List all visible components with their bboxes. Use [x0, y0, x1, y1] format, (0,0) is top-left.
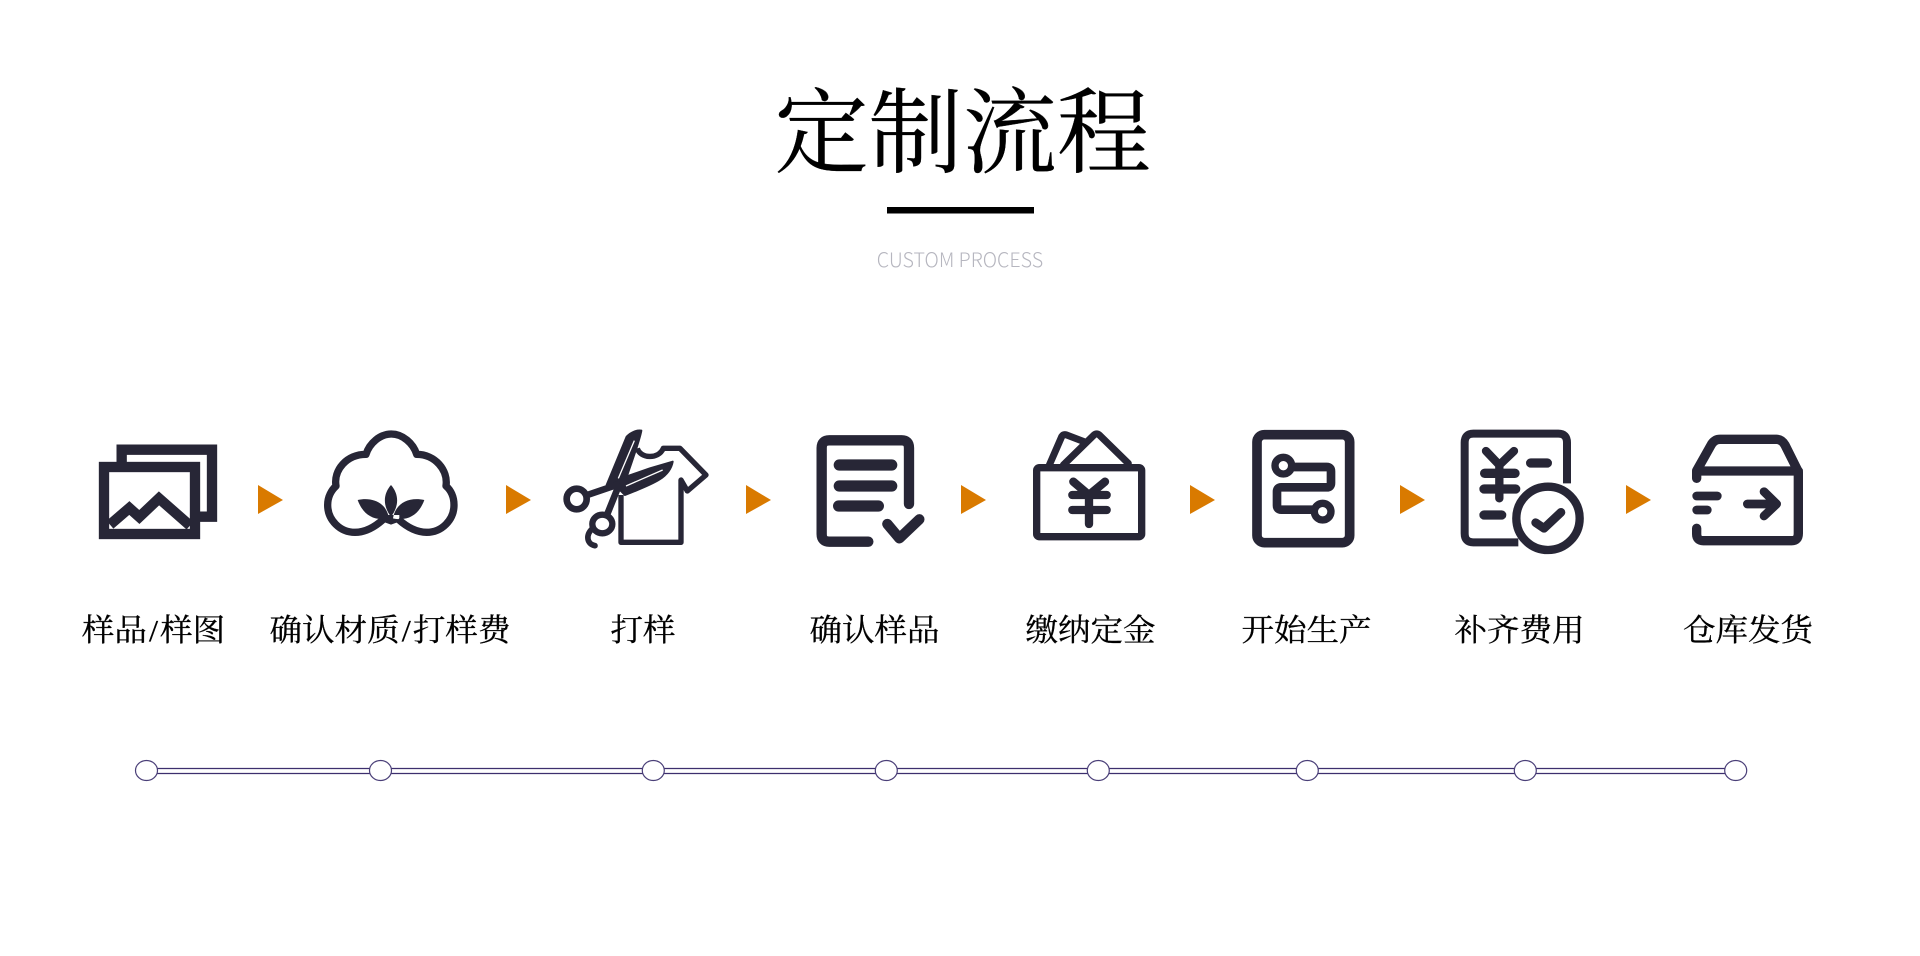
title underline: [887, 207, 1034, 214]
label: confirm material and fee: 确认材质/打样费: [270, 614, 512, 648]
arrow 4: [961, 485, 986, 514]
icon: warehouse box: [1697, 439, 1798, 541]
label: samples: 样品/样图: [82, 614, 225, 648]
arrow 2: [506, 485, 531, 514]
icon: stacked pictures: [104, 450, 212, 534]
label: start production: 开始生产: [1241, 606, 1372, 651]
arrow 6: [1400, 485, 1425, 514]
icon: production flow: [1257, 435, 1350, 543]
icon: wallet with yen: [1037, 434, 1142, 537]
title: 定制流程: [774, 58, 1151, 192]
icon: cotton: [328, 434, 454, 532]
arrow 7: [1626, 485, 1651, 514]
label: warehouse shipping: 仓库发货: [1683, 606, 1815, 651]
arrow 3: [746, 485, 771, 514]
icon: bill with check: [1465, 434, 1580, 550]
arrow 1: [258, 485, 283, 514]
icon: scissors and shirt: [567, 431, 706, 546]
label: proofing: 打样: [610, 606, 676, 651]
timeline: [136, 760, 1747, 780]
icon: document with check: [822, 440, 919, 542]
arrow 5: [1190, 485, 1215, 514]
label: confirm sample: 确认样品: [809, 606, 940, 651]
label: pay balance: 补齐费用: [1454, 606, 1585, 651]
subtitle: CUSTOM PROCESS: [877, 244, 1043, 273]
label: pay deposit: 缴纳定金: [1025, 606, 1156, 651]
